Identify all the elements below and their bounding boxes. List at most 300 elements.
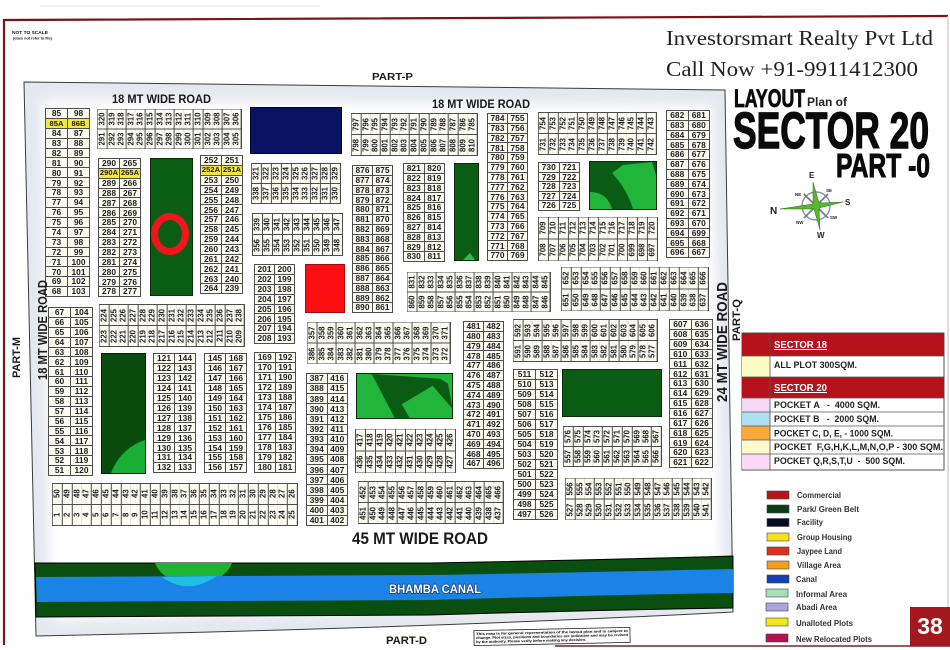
block: plots 831-860: 859	[417, 295, 426, 308]
block: plots 291-320: 306	[232, 113, 241, 126]
block: plots 321-338: 324	[281, 167, 290, 180]
block: plots 169-192: 189	[278, 382, 292, 392]
row: sector 18 header: SECTOR 18	[774, 340, 827, 351]
block: plots 831-860: 843	[522, 276, 531, 289]
block: plots 252-239: 258	[204, 224, 218, 234]
block: plots 169-192: 177	[258, 432, 272, 442]
block: plots 831-860: 836	[455, 276, 464, 289]
block: plots 637-666	[561, 267, 709, 311]
block: plots 169-192: 183	[278, 442, 292, 452]
block: plots 1-50: 14	[180, 511, 189, 519]
block: plots 497-526: 511	[518, 369, 531, 379]
block: plots 321-338: 326	[301, 167, 310, 180]
block: plots 497-526: 526	[540, 509, 553, 519]
block: plots 481-496: 469	[466, 439, 480, 449]
block: plots 67-51: 112	[75, 386, 88, 396]
block: plots 697-720	[538, 217, 658, 261]
block: plots 527-556: 535	[643, 503, 652, 516]
block: plots 357-386	[307, 322, 451, 364]
block: plots 876-861: 866	[376, 253, 389, 263]
block: plots 357-386: 361	[345, 326, 354, 339]
block: plots 527-556: 537	[663, 503, 672, 516]
block: plots 437-466: 441	[455, 506, 464, 520]
block: plots 577-606: 579	[629, 344, 638, 358]
legend item: facility: Facility	[797, 518, 824, 527]
block: plots 387-416: 408	[330, 454, 344, 464]
block: plots 291-320: 312	[174, 113, 183, 126]
block: plots 797-810: 806	[429, 138, 438, 152]
icon: compass	[770, 171, 851, 240]
label: part D: PART-D	[386, 635, 427, 647]
block: plots 731-754: 749	[588, 116, 597, 130]
block: plots 387-416: 406	[330, 475, 344, 485]
block: plots 85-68: 80	[52, 168, 61, 178]
block: plots 437-466: 466	[494, 486, 503, 499]
block: plots 697-720: 701	[608, 243, 617, 256]
block: plots 821-811: 823	[407, 183, 421, 193]
block: plots 731-754: 751	[568, 116, 577, 130]
block: plots 321-338: 334	[291, 187, 300, 200]
park: lower left green	[101, 353, 146, 474]
block: plots 417-436: 419	[376, 434, 385, 447]
block: plots 357-386: 381	[355, 347, 364, 360]
block: plots 1-50: 17	[209, 511, 218, 519]
block: plots 481-496: 467	[466, 458, 480, 468]
block: plots 85-68: 86B	[72, 119, 85, 128]
block: plots 121-144	[153, 353, 196, 473]
block: plots 291-320: 316	[136, 113, 145, 126]
block: plots 417-436: 435	[366, 455, 375, 468]
block: plots 417-436: 433	[386, 455, 395, 468]
block: plots 387-416: 407	[330, 465, 344, 475]
block: plots 67-51: 54	[55, 436, 64, 446]
block: plots 481-496: 481	[466, 321, 480, 331]
block: plots 527-556: 539	[682, 503, 691, 516]
block: plots 831-860: 860	[407, 295, 416, 308]
block: plots 797-810: 810	[468, 138, 477, 152]
block: plots 437-466: 463	[465, 486, 474, 499]
block: plots 437-466: 465	[484, 486, 493, 499]
contact details: Investorsmart Realty Pvt Ltd	[666, 26, 933, 50]
block: plots 290-265: 283	[102, 237, 116, 247]
block: plots 252-239: 254	[204, 185, 218, 195]
block: plots 252-239: 246	[225, 214, 239, 224]
block: plots 321-338: 322	[261, 167, 270, 180]
legend item: village area	[767, 561, 842, 570]
block: plots 497-526: 522	[540, 469, 553, 479]
block: plots 731-754: 743	[647, 116, 656, 130]
block: plots 209-238: 211	[215, 330, 224, 342]
block: plots 607-636: 612	[673, 369, 687, 379]
block: plots 145-168: 145	[208, 353, 222, 363]
block: plots 321-338: 325	[291, 167, 300, 180]
block: plots 697-720: 698	[638, 243, 647, 256]
block: plots 797-810: 793	[390, 118, 399, 131]
block: plots 387-416: 411	[330, 424, 344, 434]
block: plots 209-238: 231	[167, 308, 176, 322]
block: plots 607-636: 613	[673, 378, 687, 388]
block: plots 387-416: 399	[310, 495, 324, 505]
block: plots 831-860	[407, 272, 551, 312]
park: upper right green	[589, 161, 657, 210]
block: plots 637-666: 654	[581, 272, 590, 285]
block: plots 291-320: 303	[213, 132, 222, 145]
block: plots 821-811: 818	[427, 183, 441, 193]
block: plots 1-50: 50	[52, 490, 62, 498]
block: plots 339-356: 350	[313, 238, 322, 252]
block: plots 876-861: 884	[356, 244, 369, 254]
block: plots 637-666: 648	[591, 293, 600, 306]
block: plots 637-666: 649	[581, 293, 590, 306]
block: plots 85-68: 72	[52, 247, 61, 257]
block: plots 682-667: 670	[692, 218, 706, 228]
row: pocket A: POCKET A - 4000 SQM.	[774, 400, 880, 411]
block: plots 1-50: 30	[248, 490, 258, 498]
block: plots 321-338: 337	[261, 187, 270, 200]
block: plots 607-636: 631	[695, 369, 709, 379]
block: plots 145-168: 164	[229, 393, 243, 403]
block: plots 577-606: 583	[590, 344, 599, 358]
block: plots 67-51: 114	[75, 406, 88, 416]
block: plots 607-636: 634	[695, 339, 709, 349]
block: plots 821-811: 826	[407, 212, 421, 222]
block: plots 481-496: 493	[486, 429, 500, 439]
block: plots 527-556: 553	[595, 482, 604, 495]
block: plots 437-466: 454	[378, 486, 387, 499]
block: plots 784-769: 770	[490, 250, 504, 260]
block: plots 1-50: 15	[190, 511, 199, 519]
block: plots 417-436: 429	[426, 455, 435, 468]
block: plots 577-606: 602	[609, 324, 618, 337]
block: plots 557-576: 568	[642, 430, 651, 443]
legend item: commercial	[767, 491, 841, 500]
block: plots 85-68: 69	[52, 276, 61, 286]
block: plots 831-860: 834	[436, 276, 445, 289]
block: plots 387-416: 391	[310, 414, 324, 424]
block: plots 831-860: 850	[503, 295, 512, 308]
block: plots 731-754: 745	[627, 116, 636, 130]
block: plots 557-576: 573	[593, 430, 602, 443]
block: plots 417-436: 434	[376, 455, 385, 468]
block: plots 417-436: 421	[396, 434, 405, 447]
legend item: canal: Canal	[796, 575, 817, 584]
block: plots 387-416	[306, 373, 348, 526]
icon: compass: SE	[826, 188, 832, 193]
block: plots 821-811: 825	[407, 202, 421, 212]
block: plots 252-239: 242	[225, 254, 239, 264]
block: plots 357-386: 358	[317, 326, 326, 339]
block: plots 607-636: 619	[673, 438, 687, 448]
block: plots 831-860: 835	[445, 276, 454, 289]
block: plots 731-754: 747	[607, 116, 616, 130]
block: plots 437-466: 458	[416, 486, 425, 499]
block: plots 557-576: 565	[642, 450, 651, 463]
block: plots 201-193: 205	[258, 304, 271, 314]
block: plots 481-496: 473	[466, 400, 480, 410]
block: plots 637-666: 641	[660, 293, 668, 306]
block: plots 387-416: 405	[330, 485, 344, 495]
block: plots 697-720: 704	[578, 243, 587, 256]
block: plots 209-238	[99, 304, 245, 347]
block: plots 577-606: 585	[571, 344, 580, 358]
block: plots 607-636: 635	[695, 329, 709, 339]
icon: compass: NE	[795, 192, 801, 197]
block: plots 290-265: 279	[102, 276, 116, 286]
legend item: village area: Village Area	[797, 561, 842, 570]
row: pocket C, D, E	[742, 426, 893, 440]
block: plots 387-416: 404	[330, 495, 344, 505]
block: plots 607-636: 611	[673, 359, 687, 369]
panel: plot size table	[742, 332, 944, 470]
block: plots 121-144: 140	[178, 393, 192, 403]
block: plots 682-667: 680	[692, 120, 706, 130]
block: plots 67-51: 107	[74, 337, 88, 347]
block: plots 85-68: 96	[74, 217, 83, 227]
block: plots 321-338: 333	[301, 187, 310, 200]
block: plots 577-606: 578	[638, 344, 647, 358]
note: disclaimer box: by the authority. Please verify before making any decision.	[476, 638, 586, 644]
block: plots 527-556: 544	[682, 482, 691, 495]
block: plots 357-386: 377	[393, 347, 402, 360]
block: plots 557-576: 570	[622, 430, 631, 443]
block: plots 527-556: 547	[653, 482, 662, 495]
block: plots 831-860: 858	[426, 295, 435, 308]
block: plots 321-338: 321	[252, 167, 261, 180]
block: plots 876-861: 890	[356, 302, 369, 312]
block: plots 252-239: 240	[225, 274, 239, 284]
block: plots 784-769: 769	[510, 250, 524, 260]
block: plots 607-636: 609	[673, 339, 687, 349]
block: plots 67-51: 53	[55, 446, 64, 456]
block: plots 607-636	[669, 319, 713, 468]
block: plots 145-168: 160	[229, 433, 243, 443]
block: plots 731-754: 740	[627, 138, 636, 151]
block: plots 557-576	[563, 426, 662, 467]
page number badge	[910, 607, 950, 646]
block: plots 1-50: 20	[239, 511, 248, 519]
block: plots 682-667: 696	[670, 247, 684, 257]
block: plots 797-810: 804	[410, 138, 419, 152]
block: plots 821-811: 830	[407, 251, 421, 261]
block: plots 527-556: 548	[643, 482, 652, 495]
block: plots 290-265: 277	[123, 286, 137, 296]
block: plots 821-811: 816	[427, 202, 441, 212]
block: plots 697-720: 703	[588, 243, 597, 256]
block: plots 1-50: 49	[62, 490, 71, 498]
block: plots 209-238: 215	[177, 330, 186, 343]
block: plots 784-769: 776	[490, 192, 504, 202]
block: plots 387-416: 388	[310, 383, 324, 393]
block: plots 145-168: 166	[229, 373, 243, 383]
block: plots 481-496: 491	[486, 409, 500, 419]
block: plots 417-436	[355, 429, 456, 473]
block: plots 290-265: 265A	[121, 168, 139, 177]
block: plots 557-576: 559	[583, 450, 592, 463]
block: plots 145-168	[204, 353, 247, 473]
block: plots 797-810: 796	[361, 118, 370, 131]
block: plots 1-50: 34	[209, 490, 218, 498]
block: plots 876-861: 869	[376, 224, 389, 234]
note: disclaimer box: This map is for general representation of the layout plan and is subject to	[476, 629, 628, 636]
block: plots 1-50: 2	[62, 513, 71, 517]
block: plots 557-576: 575	[573, 430, 582, 443]
block: plots 577-606: 596	[552, 324, 561, 337]
block: plots 821-811: 827	[407, 222, 421, 232]
block: plots 637-666: 647	[601, 293, 610, 306]
block: plots 481-496: 494	[486, 439, 500, 449]
block: plots 357-386: 386	[307, 347, 316, 360]
block: plots 290-265: 290A	[100, 168, 118, 177]
block: plots 557-576: 566	[652, 450, 661, 463]
block: plots 85-68: 99	[74, 247, 83, 257]
block: plots 497-526: 516	[540, 409, 553, 419]
block: plots 497-526: 505	[518, 429, 531, 439]
block: plots 437-466: 438	[484, 506, 493, 520]
block: plots 201-193: 196	[278, 304, 291, 314]
block: plots 730-721: 724	[562, 191, 576, 201]
block: plots 607-636: 622	[695, 457, 709, 467]
block: plots 637-666: 653	[571, 272, 580, 285]
block: plots 169-192: 188	[278, 392, 292, 402]
block: plots 527-556: 541	[702, 503, 711, 516]
block: plots 527-556: 528	[575, 503, 584, 516]
block: plots 682-667: 693	[670, 218, 684, 228]
block: plots 169-192: 185	[278, 422, 292, 432]
row: pocket Q to U	[742, 454, 905, 469]
block: plots 682-667: 668	[692, 238, 706, 248]
block: plots 481-496: 472	[466, 409, 480, 419]
block: plots 145-168: 161	[229, 423, 243, 433]
block: plots 607-636: 627	[695, 408, 709, 418]
block: plots 321-338: 323	[271, 167, 280, 180]
block: plots 387-416: 387	[310, 373, 324, 383]
block: plots 85-68: 97	[74, 227, 83, 237]
block: plots 731-754: 752	[558, 116, 567, 130]
block: plots 417-436: 431	[406, 455, 415, 468]
block: plots 67-51: 58	[55, 396, 64, 406]
block: plots 784-769: 783	[490, 123, 504, 133]
block: plots 1-50: 32	[229, 490, 238, 498]
block: plots 339-356: 340	[263, 218, 272, 231]
block: plots 291-320: 315	[145, 113, 154, 126]
block: plots 784-769: 781	[490, 143, 504, 153]
block: plots 557-576: 564	[632, 450, 641, 463]
block: plots 797-810: 785	[468, 118, 477, 131]
block: plots 876-861: 888	[356, 283, 369, 293]
block: plots 321-338: 327	[311, 167, 320, 180]
block: plots 121-144: 127	[157, 413, 171, 423]
block: plots 145-168: 165	[229, 383, 243, 393]
block: plots 357-386: 385	[317, 347, 326, 360]
block: plots 252-239: 263	[204, 274, 218, 284]
block: plots 387-416: 393	[310, 434, 324, 444]
block: plots 831-860: 855	[455, 295, 464, 308]
block: plots 387-416: 390	[310, 404, 324, 414]
block: plots 577-606: 580	[619, 344, 628, 358]
block: plots 437-466: 448	[387, 506, 396, 520]
block: plots 437-466: 443	[436, 506, 445, 520]
label: 18 MT wide road, vertical: 18 MT WIDE ROAD	[36, 280, 50, 380]
canal with green belts	[34, 556, 734, 618]
block: plots 876-861	[352, 165, 393, 313]
block: plots 121-144: 130	[157, 442, 171, 452]
block: plots 821-811: 822	[407, 173, 421, 183]
block: plots 252-239: 243	[225, 244, 239, 254]
legend: land use key	[766, 490, 873, 644]
block: plots 252-239: 252	[204, 155, 218, 165]
block: plots 291-320: 291	[97, 132, 106, 145]
block: plots 417-436: 430	[416, 455, 425, 468]
block: plots 497-526: 498	[518, 499, 531, 509]
block: plots 527-556: 530	[595, 503, 604, 516]
block: plots 252-239: 255	[204, 195, 218, 205]
block: plots 784-769: 760	[510, 162, 524, 172]
block: plots 481-496: 484	[486, 341, 500, 351]
block: plots 577-606: 604	[629, 324, 638, 337]
block: plots 481-496: 483	[486, 331, 500, 341]
legend item: group housing: Group Housing	[797, 533, 852, 542]
block: plots 784-769: 777	[490, 182, 504, 192]
block: plots 497-526: 508	[518, 399, 531, 409]
block: plots 85-68: 98	[74, 237, 83, 247]
block: plots 731-754: 741	[637, 138, 646, 151]
block: plots 831-860: 851	[493, 295, 502, 308]
block: plots 637-666: 656	[601, 272, 610, 285]
label: 18 MT wide road, left: 18 MT WIDE ROAD	[112, 92, 211, 106]
block: plots 67-51: 63	[55, 347, 64, 357]
block: plots 339-356: 351	[303, 238, 312, 252]
block: plots 831-860: 847	[531, 295, 540, 308]
block: plots 169-192: 181	[278, 462, 292, 472]
label: Bhamba canal: BHAMBA CANAL	[389, 584, 481, 596]
legend item: informal area: Informal Area	[796, 590, 848, 599]
block: plots 730-721: 725	[562, 200, 576, 210]
block: plots 831-860: 852	[484, 295, 493, 308]
block: plots 387-416: 394	[310, 444, 324, 454]
block: plots 67-51: 120	[74, 465, 88, 475]
block: plots 437-466: 461	[445, 486, 454, 499]
block: plots 527-556: 540	[692, 503, 701, 516]
block: plots 821-811: 829	[407, 242, 421, 252]
block: plots 481-496: 471	[466, 419, 480, 429]
block: plots 209-238: 238	[235, 308, 244, 322]
block: plots 784-769: 780	[490, 152, 504, 162]
block: plots 876-861: 868	[376, 234, 389, 244]
block: plots 557-576: 557	[564, 450, 572, 463]
block: plots 876-861: 886	[356, 263, 369, 273]
block: plots 637-666: 638	[689, 293, 698, 306]
block: plots 67-51: 52	[55, 455, 64, 465]
icon: compass: W	[817, 231, 825, 240]
block: plots 876-861: 880	[356, 204, 369, 214]
block: plots 201-193: 194	[278, 323, 291, 333]
block: plots 607-636: 614	[673, 388, 687, 398]
block: plots 121-144: 128	[157, 423, 171, 433]
block: plots 291-320: 294	[126, 132, 135, 145]
block: plots 209-238: 223	[99, 330, 108, 343]
block: plots 201-193: 193	[278, 333, 291, 343]
block: plots 637-666: 664	[679, 272, 688, 285]
block: plots 697-720: 697	[648, 243, 657, 256]
block: plots 481-496: 476	[466, 370, 480, 380]
block: plots 85-68: 74	[52, 227, 61, 237]
block: plots 121-144: 126	[157, 403, 171, 413]
block: plots 784-769: 756	[510, 123, 524, 133]
block: plots 252-239: 241	[225, 264, 239, 274]
block: plots 290-265: 275	[123, 267, 137, 277]
block: plots 497-526: 521	[540, 459, 553, 469]
legend item: abadi area: Abadi Area	[796, 603, 838, 612]
